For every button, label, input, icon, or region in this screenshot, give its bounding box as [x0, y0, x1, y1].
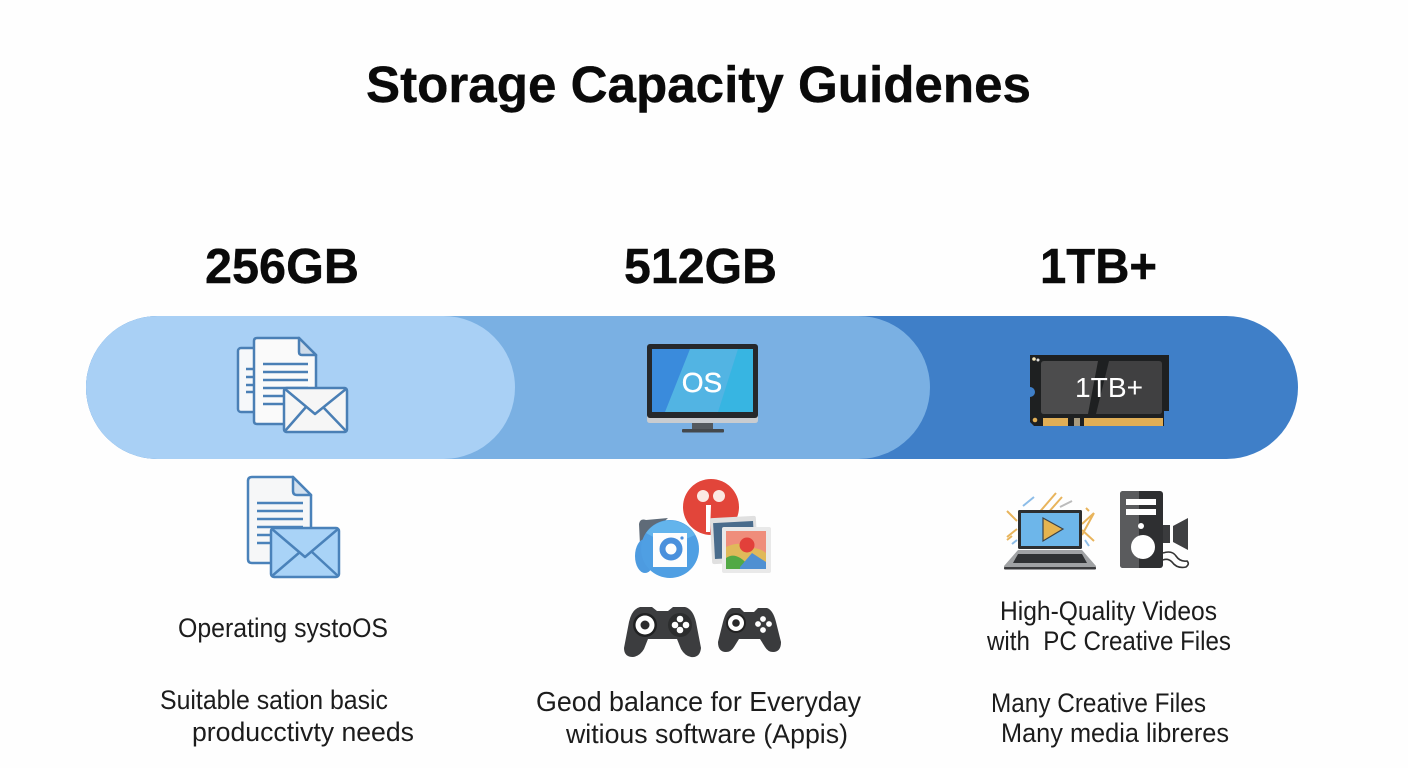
label: OS: OS [682, 367, 722, 398]
icon: apps and photos [635, 479, 771, 578]
heading: 1TB+: 1TB+ [1040, 240, 1157, 294]
text: column 1 description: Suitable sation basic [160, 685, 388, 715]
text: column 1 description: producctivty needs [192, 717, 414, 747]
text: column 1 description [160, 685, 414, 747]
label: 1TB+: 1TB+ [1075, 372, 1143, 403]
text: column 3 video line: High-Quality Videos [1000, 596, 1217, 626]
icon: document and envelope [248, 477, 339, 577]
icon: small controller [718, 608, 781, 652]
capacity bar [86, 316, 1298, 459]
text: column 3 description: Many Creative Files [991, 688, 1206, 718]
title: Storage Capacity Guidenes [366, 56, 1031, 113]
text: column 3 description [991, 688, 1229, 748]
icon: laptop playing video [1004, 493, 1096, 570]
icon: PC tower and video camera [1120, 491, 1188, 568]
text: column 3 video line [986, 596, 1231, 656]
icon: monitor with OS [647, 344, 758, 432]
icon: SSD 1TB+ [1030, 355, 1169, 426]
text: column 2 description: Geod balance for Everyday [536, 686, 861, 717]
heading: 512GB: 512GB [624, 240, 777, 294]
text: column 2 description: witious software (Appis) [565, 719, 848, 749]
icon: game controllers [624, 607, 781, 657]
text: column 2 description [536, 686, 861, 749]
icon: documents and envelope on bar [238, 338, 347, 432]
text: column 3 video line: with PC Creative Files [986, 626, 1231, 656]
text: column 3 description: Many media libreres [1001, 718, 1229, 748]
text: column 1 line: Operating systoOS [178, 613, 388, 643]
heading: 256GB: 256GB [205, 240, 359, 294]
icon: large controller [624, 607, 701, 657]
